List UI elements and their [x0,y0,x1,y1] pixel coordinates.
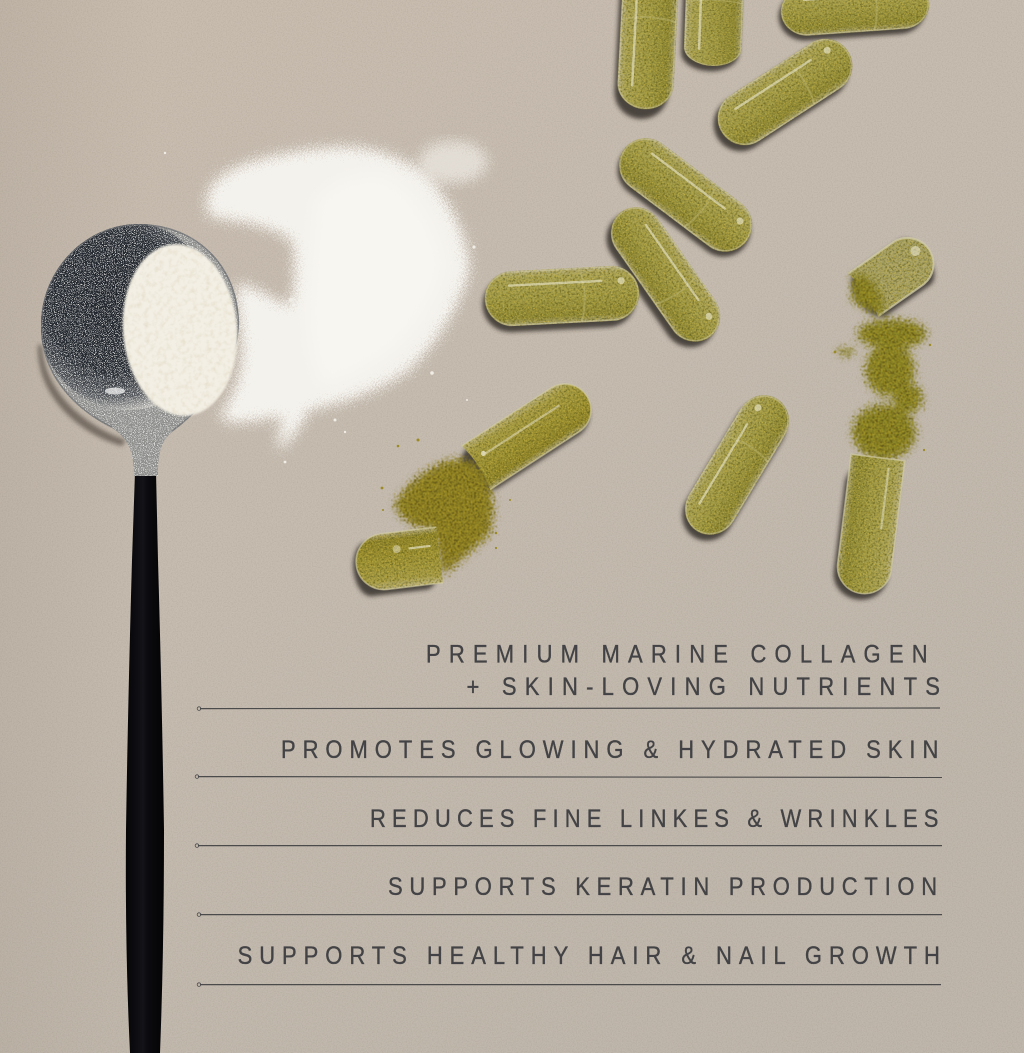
benefit: keratin production: SUPPORTS KERATIN PRODUCTION [388,873,937,900]
scattered olive grains [381,344,931,549]
benefits text list [195,640,942,986]
olive powder mound at open capsule mouth [852,275,883,312]
spoon: bowl and neck [40,224,239,476]
open capsule: cap piece, lower left [353,527,443,593]
spoon: cast shadow [38,345,126,446]
powder: faint upper right smudge [419,142,487,182]
heading: premium marine collagen: PREMIUM MARINE COLLAGEN [426,640,928,668]
benefit: keratin production [197,873,942,916]
white collagen powder heap [164,142,487,463]
olive powder pile, right [838,320,926,459]
benefit: hair and nail growth: SUPPORTS HEALTHY HAIR & NAIL GROWTH [238,942,940,969]
benefit: glowing skin: PROMOTES GLOWING & HYDRATED SKIN [281,736,938,763]
powder: dense centre [308,174,445,385]
powder: outline of spread, arm and tail [208,148,468,452]
open capsule: right top [848,228,944,316]
powder: scattered grains [164,152,476,463]
heading: premium marine collagen: + SKIN-LOVING NUTRIENTS [466,673,940,700]
capsule: centre steep diagonal [600,197,731,352]
capsule group [350,0,942,603]
capsule: top left [616,0,680,111]
open capsule: upper half, lower left [462,374,601,490]
heading: premium marine collagen [197,640,940,710]
benefit: fine lines and wrinkles [195,805,942,847]
olive powder pile, lower left [395,460,493,574]
capsule: upper right diagonal [707,29,863,155]
spoon: black handle [126,469,164,1053]
spoon: light glint [105,388,125,394]
benefit: hair and nail growth [197,942,941,986]
capsule: centre diagonal [608,127,763,263]
capsule: lower centre [675,385,799,545]
open capsule: right bottom [834,454,905,597]
spoon with collagen powder [30,215,250,1053]
capsule shadows [350,0,942,603]
capsule: top middle [683,0,745,67]
spoon: heaped collagen powder [116,239,244,421]
capsule: top right [779,0,931,37]
benefit: glowing skin [195,736,942,778]
benefit: fine lines and wrinkles: REDUCES FINE LINKES & WRINKLES [370,805,938,832]
capsule: centre horizontal [483,264,641,328]
